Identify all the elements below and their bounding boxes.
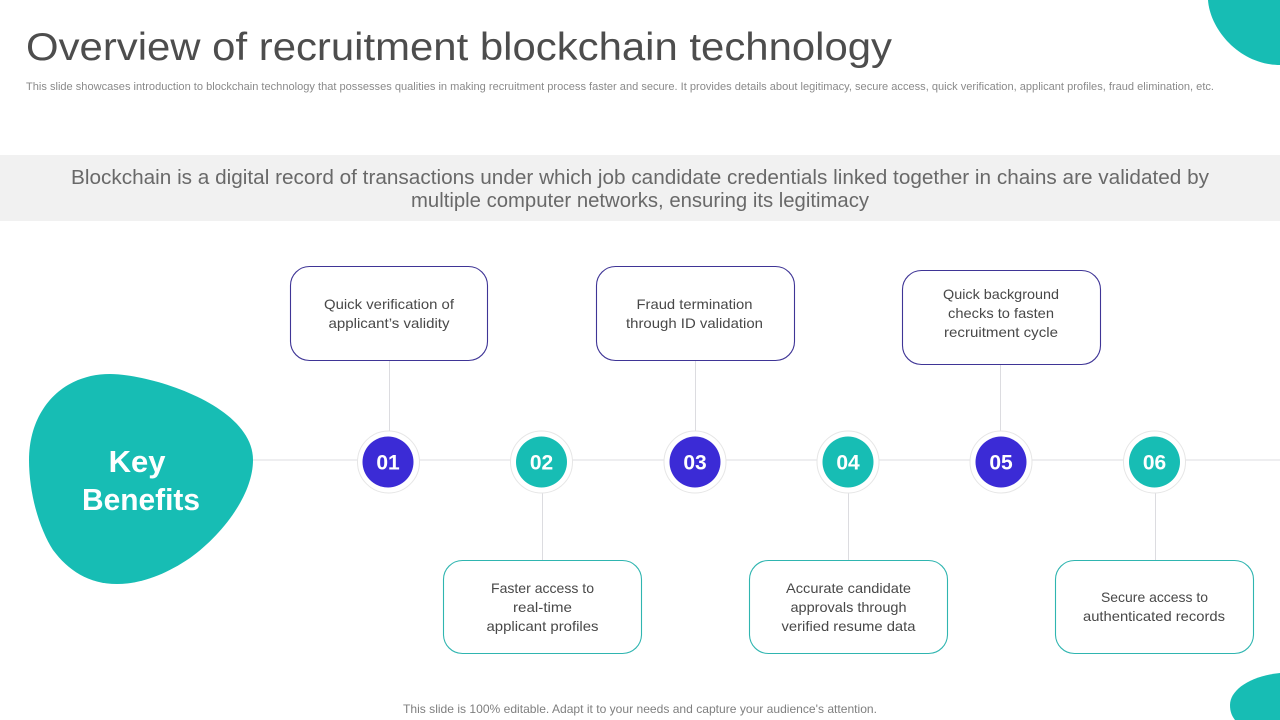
node 05 (970, 431, 1032, 493)
callout: benefit 04: Accurate candidate (786, 580, 911, 596)
callout: benefit 02 (444, 560, 642, 654)
key benefits blob: Key (109, 444, 166, 479)
node 06: 06 (1143, 452, 1166, 474)
callout: benefit 02: Faster access to (491, 580, 594, 596)
callout: benefit 05: Quick background (943, 286, 1059, 302)
definition banner (0, 155, 1280, 221)
node 05: 05 (989, 452, 1013, 474)
node 01 (358, 431, 420, 493)
callout: benefit 05: recruitment cycle (944, 324, 1058, 340)
node 01: 01 (376, 452, 400, 474)
callout: benefit 01: applicant’s validity (328, 315, 450, 331)
definition banner: Blockchain is a digital record of transactions under which job candidate credentials linked together in chains are validated by (71, 167, 1209, 189)
subtitle description: This slide showcases introduction to blockchain technology that possesses qualities in making recruitment process faster and secure. It provides details about legitimacy, secure access, quick verification, applicant profiles, fraud elimination, etc. (26, 81, 1214, 93)
node 03 (664, 431, 726, 493)
callout: benefit 03 (596, 266, 794, 360)
definition banner: multiple computer networks, ensuring its legitimacy (411, 190, 869, 212)
callout: benefit 06: Secure access to (1101, 589, 1208, 605)
key benefits blob (29, 374, 253, 584)
key benefits blob: Benefits (82, 482, 200, 517)
node 02: 02 (530, 452, 553, 474)
callout: benefit 06: authenticated records (1083, 608, 1225, 624)
decorative blob: top right (1208, 0, 1280, 65)
callout: benefit 04: verified resume data (782, 618, 916, 634)
callout: benefit 05: checks to fasten (948, 305, 1054, 321)
callout: benefit 01 (290, 266, 488, 360)
node 02 (510, 431, 572, 493)
footer note: This slide is 100% editable. Adapt it to your needs and capture your audience's attention. (403, 702, 877, 716)
node 06 (1124, 431, 1186, 493)
title: Overview of recruitment blockchain technology (26, 26, 893, 69)
callout: benefit 05 (902, 270, 1100, 364)
node 04: 04 (836, 452, 860, 474)
timeline connector lines (250, 361, 1280, 560)
callout: benefit 04 (750, 560, 948, 654)
callout: benefit 02: applicant profiles (486, 618, 598, 634)
callout: benefit 06 (1056, 560, 1254, 654)
decorative blob: bottom right (1230, 673, 1280, 720)
callout: benefit 03: Fraud termination (636, 296, 752, 312)
node 03: 03 (683, 452, 707, 474)
callout: benefit 02: real-time (513, 599, 572, 615)
callout: benefit 03: through ID validation (626, 315, 763, 331)
node 04 (817, 431, 879, 493)
callout: benefit 01: Quick verification of (324, 296, 454, 312)
callout: benefit 04: approvals through (790, 599, 906, 615)
